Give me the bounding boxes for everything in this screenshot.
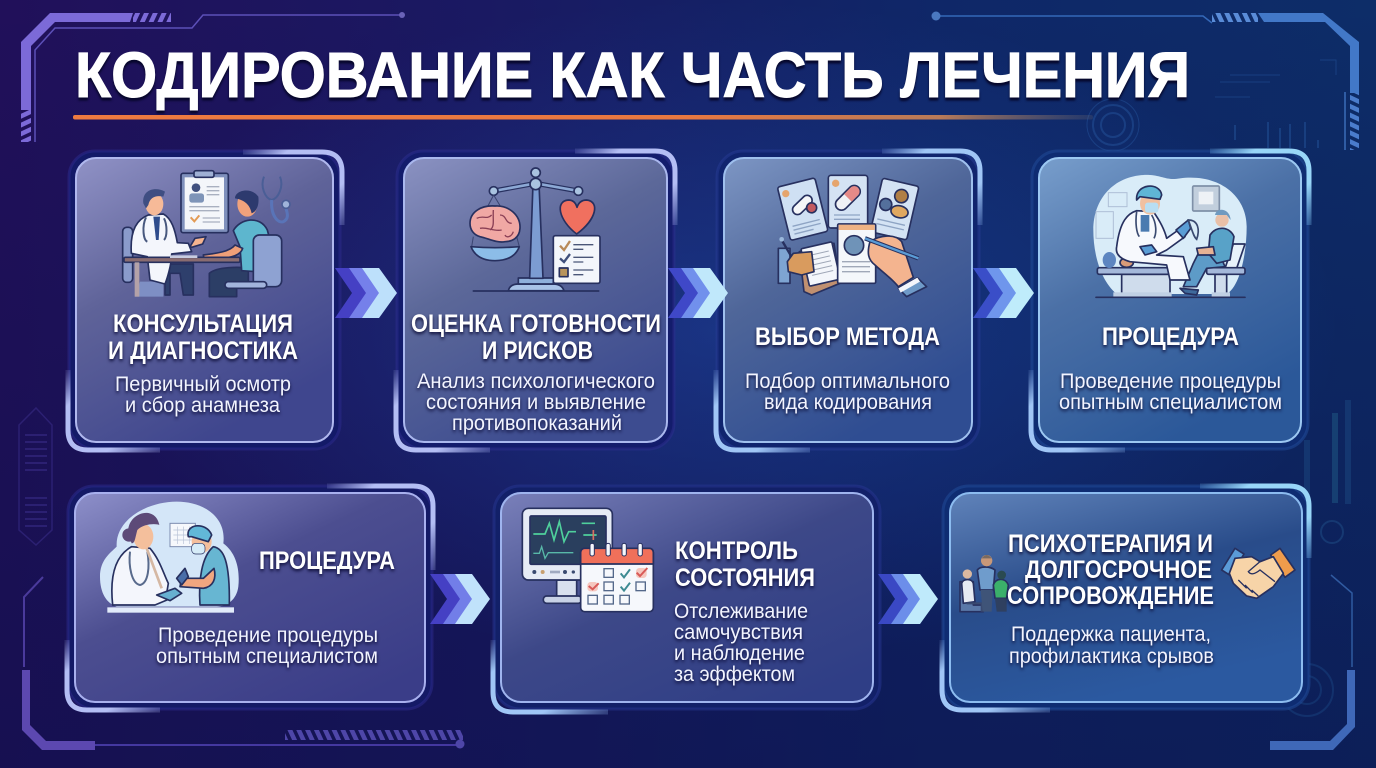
bracket: bottom left xyxy=(68,370,160,450)
description: вида кодирования xyxy=(764,391,932,414)
heading: ПРОЦЕДУРА xyxy=(1102,323,1239,351)
description xyxy=(156,624,378,668)
frame: top-right corner xyxy=(932,12,1359,150)
bracket: top right xyxy=(1210,151,1309,225)
description: опытным специалистом xyxy=(1059,391,1282,414)
heading: И ДИАГНОСТИКА xyxy=(108,337,298,365)
card plate xyxy=(950,493,1302,702)
description: и сбор анамнеза xyxy=(125,394,280,417)
bracket: bottom left xyxy=(716,370,810,450)
panel: step 3 method choice xyxy=(716,151,980,450)
description: состояния и выявление xyxy=(426,391,646,414)
panel: step 5 procedure xyxy=(67,486,433,710)
description: Анализ психологического xyxy=(417,370,655,393)
frame: top-left corner xyxy=(21,12,405,142)
bracket: top right xyxy=(327,486,433,570)
bracket: top right xyxy=(243,152,342,225)
bracket: top right xyxy=(1200,486,1309,558)
card plate xyxy=(724,158,972,442)
description xyxy=(745,370,950,414)
card plate xyxy=(1039,158,1301,442)
heading: КОНСУЛЬТАЦИЯ xyxy=(113,310,293,338)
icon: doctor treating a patient xyxy=(1093,175,1247,297)
decoration: right side HUD xyxy=(1281,400,1351,716)
icon: scales with brain and heart xyxy=(470,168,600,291)
bracket: bottom left xyxy=(1031,370,1125,450)
description: Проведение процедуры xyxy=(158,624,378,647)
icon: doctor and patient at a table xyxy=(123,171,290,297)
heading xyxy=(108,310,298,365)
icon: monitor and calendar xyxy=(522,508,653,612)
description: самочувствия xyxy=(674,621,803,644)
panel: step 6 monitoring xyxy=(493,486,880,712)
decoration: top-right HUD xyxy=(1087,60,1336,151)
heading: ДОЛГОСРОЧНОЕ xyxy=(1025,556,1212,584)
description: Подбор оптимального xyxy=(745,370,950,393)
heading xyxy=(675,537,815,592)
heading: СОСТОЯНИЯ xyxy=(675,564,815,592)
decoration: left side module xyxy=(19,408,52,545)
bracket: top right xyxy=(882,151,980,225)
description: и наблюдение xyxy=(674,642,805,665)
card plate xyxy=(501,493,873,702)
arrow: step 5 to 6 xyxy=(430,574,490,624)
heading xyxy=(1007,530,1214,610)
heading: ОЦЕНКА ГОТОВНОСТИ xyxy=(411,310,661,338)
frame: bottom-left corner xyxy=(22,577,95,750)
description: Первичный осмотр xyxy=(115,373,291,396)
card plate xyxy=(404,158,667,442)
icon: medicine cards and a hand writing xyxy=(777,175,927,297)
description xyxy=(115,373,291,417)
description: опытным специалистом xyxy=(156,645,378,668)
panel: step 7 psychotherapy xyxy=(942,486,1309,710)
frame: bottom-right corner xyxy=(1270,575,1355,750)
arrow: step 1 to 2 xyxy=(335,268,397,318)
card plate xyxy=(75,493,425,702)
title: КОДИРОВАНИЕ КАК ЧАСТЬ ЛЕЧЕНИЯ xyxy=(75,39,1190,111)
heading: СОПРОВОЖДЕНИЕ xyxy=(1007,582,1214,610)
heading: ВЫБОР МЕТОДА xyxy=(755,323,940,351)
icon: nurse and surgeon xyxy=(100,502,239,613)
arrow: step 2 to 3 xyxy=(668,268,728,318)
description xyxy=(674,600,808,686)
arrow: step 6 to 7 xyxy=(878,574,938,624)
description xyxy=(1009,623,1214,668)
heading: И РИСКОВ xyxy=(482,337,593,365)
icon: handshake xyxy=(1222,548,1295,598)
description: Проведение процедуры xyxy=(1060,370,1281,393)
bracket: bottom left xyxy=(493,640,608,712)
description: за эффектом xyxy=(674,663,795,686)
heading xyxy=(411,310,661,365)
description: Отслеживание xyxy=(674,600,808,623)
heading: КОНТРОЛЬ xyxy=(675,537,798,565)
description xyxy=(1059,370,1282,414)
arrow: step 3 to 4 xyxy=(973,268,1034,318)
title underline xyxy=(73,115,1093,120)
heading: ПРОЦЕДУРА xyxy=(259,547,395,575)
panel: step 1 consultation xyxy=(68,151,342,450)
icon: therapy group xyxy=(960,555,1008,612)
bracket: bottom left xyxy=(67,640,160,710)
description: Поддержка пациента, xyxy=(1011,623,1211,646)
description xyxy=(417,370,655,435)
decoration: bottom hatch strip xyxy=(95,730,464,748)
description: противопоказаний xyxy=(452,412,622,435)
bracket: bottom left xyxy=(396,370,490,450)
panel: step 4 procedure xyxy=(1031,151,1309,450)
description: профилактика срывов xyxy=(1009,645,1214,668)
card plate xyxy=(76,158,333,442)
bracket: bottom left xyxy=(942,640,1050,710)
heading: ПСИХОТЕРАПИЯ И xyxy=(1008,530,1213,558)
panel: step 2 readiness and risk xyxy=(396,151,675,450)
bracket: top right xyxy=(575,151,675,225)
